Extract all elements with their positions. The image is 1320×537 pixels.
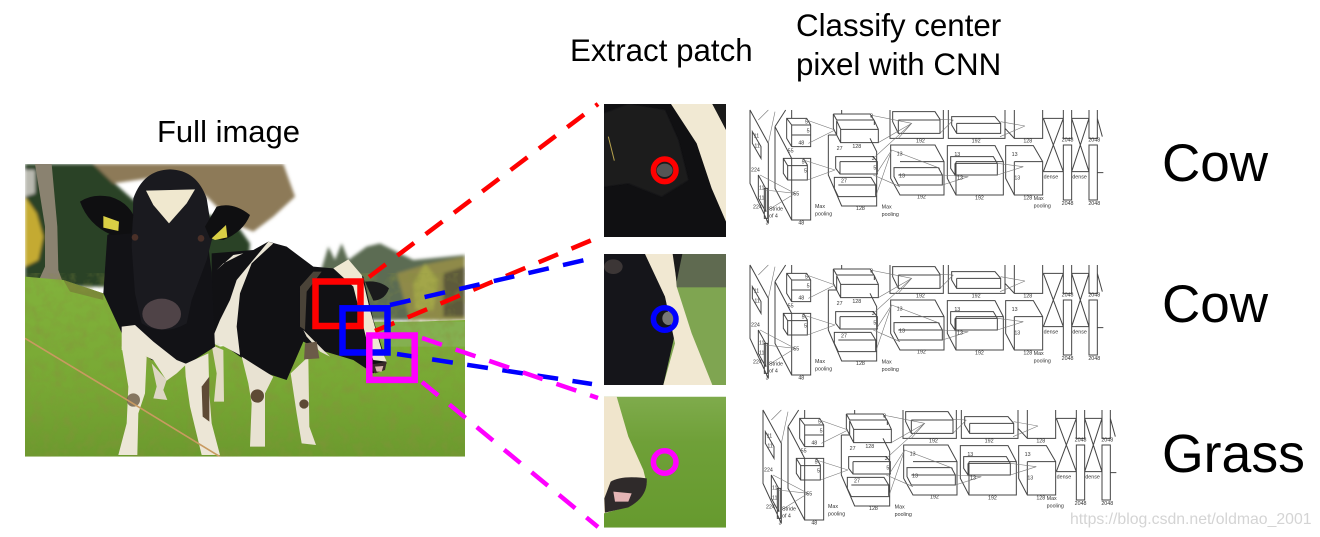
CNN diagram 2: 2048 xyxy=(1088,356,1100,362)
CNN diagram 3: 13 xyxy=(970,475,976,481)
CNN diagram 1: 192 xyxy=(975,195,984,201)
CNN diagram 1: 128 xyxy=(852,144,861,150)
CNN diagram 3: 2048 xyxy=(1075,501,1087,507)
CNN diagram 2: pooling xyxy=(882,367,899,373)
CNN diagram 1: 2048 xyxy=(1062,138,1074,144)
CNN diagram 2: 5 xyxy=(807,283,810,289)
CNN diagram 2: 13 xyxy=(899,328,905,334)
CNN diagram 2: 5 xyxy=(805,274,808,280)
CNN diagram 1: 13 xyxy=(899,173,905,179)
CNN diagram 3: 5 xyxy=(815,459,818,465)
CNN diagram 2: 192 xyxy=(917,350,926,356)
CNN diagram 3: 55 xyxy=(801,448,807,454)
CNN diagram 3: 128 xyxy=(1036,438,1045,444)
CNN diagram 2: Stride xyxy=(769,362,783,368)
red ring xyxy=(653,159,676,182)
CNN diagram 3: 3 xyxy=(779,520,782,526)
CNN diagram 3: 128 xyxy=(869,506,878,512)
CNN diagram 1: 3 xyxy=(870,113,873,119)
CNN diagram 3: 13 xyxy=(1025,452,1031,458)
CNN diagram 3: 192 xyxy=(930,495,939,501)
magenta square xyxy=(369,336,415,380)
CNN diagram 3: 192 xyxy=(988,495,997,501)
center pixel markers xyxy=(653,159,676,473)
CNN diagram 2: 13 xyxy=(897,307,903,313)
CNN diagram 3: 48 xyxy=(811,440,817,446)
heading: full image: Full image xyxy=(157,114,300,149)
CNN diagram 3: pooling xyxy=(828,511,845,517)
CNN diagram 2: 27 xyxy=(841,334,847,340)
CNN diagram 2: of 4 xyxy=(769,368,778,374)
CNN diagram 1: 224 xyxy=(751,168,760,174)
CNN diagram 1: Max xyxy=(1034,196,1044,202)
CNN diagram 2: 5 xyxy=(802,314,805,320)
CNN diagram 1: 5 xyxy=(873,165,876,171)
heading: classify center pixel with CNN xyxy=(796,8,1001,82)
class label: Cow: Cow xyxy=(1162,275,1269,334)
CNN diagram 1: 3 xyxy=(872,156,875,162)
CNN diagram 3: 55 xyxy=(806,492,812,498)
CNN diagram 1: 13 xyxy=(897,152,903,158)
CNN diagram 2: dense xyxy=(1072,330,1087,336)
CNN diagram 3: 13 xyxy=(910,452,916,458)
CNN diagram 3: 48 xyxy=(811,521,817,527)
CNN diagram 3: 3 xyxy=(885,456,888,462)
CNN diagram 1: dense xyxy=(1044,175,1058,181)
CNN diagram 2: 27 xyxy=(837,301,843,307)
CNN diagram 1: 11 xyxy=(759,195,765,201)
CNN diagram 1: of 4 xyxy=(769,213,778,219)
class label: Cow: Cow xyxy=(1162,134,1269,193)
photo: two cows in a pasture xyxy=(25,164,465,457)
heading: classify center pixel with CNN: Classify center xyxy=(796,8,1001,43)
CNN diagram 2: 2048 xyxy=(1062,356,1074,362)
CNN diagram 2: 128 xyxy=(1023,350,1032,356)
CNN diagram 2: dense xyxy=(1044,330,1058,336)
CNN diagram 1: 128 xyxy=(1023,138,1032,144)
CNN diagram 1: 5 xyxy=(804,169,807,175)
CNN diagram 2: 55 xyxy=(788,303,794,309)
CNN diagram 3: Max xyxy=(828,504,838,510)
CNN diagram 1: 5 xyxy=(805,119,808,125)
CNN diagram 3: Max xyxy=(895,505,905,511)
class label: Grass: Grass xyxy=(1162,424,1305,484)
CNN diagram 3: 224 xyxy=(764,468,773,474)
CNN diagram 2: pooling xyxy=(815,366,832,372)
CNN diagram 3: dense xyxy=(1057,475,1071,481)
CNN diagram 1: pooling xyxy=(815,211,832,217)
CNN diagram 1: 27 xyxy=(837,146,843,152)
CNN diagram 1: 3 xyxy=(766,220,769,226)
CNN diagram 2: 55 xyxy=(793,347,799,353)
CNN diagram 2: 2048 xyxy=(1088,293,1100,299)
CNN diagram 1: 11 xyxy=(759,185,765,191)
CNN diagram 2: 128 xyxy=(856,361,865,367)
CNN diagram 2: 192 xyxy=(916,293,925,299)
CNN diagram 3: 13 xyxy=(912,473,918,479)
CNN diagram 2: 224 xyxy=(751,323,760,329)
CNN diagram 2: 3 xyxy=(870,268,873,274)
CNN diagram 2: 13 xyxy=(954,307,960,313)
CNN diagram 1 xyxy=(750,110,1103,227)
CNN diagram 3: 27 xyxy=(850,446,856,452)
CNN diagram 1: 2048 xyxy=(1088,138,1100,144)
CNN diagram 1: Max xyxy=(882,205,892,211)
CNN diagram 2: 224 xyxy=(753,359,762,365)
CNN diagram 2: 128 xyxy=(1023,293,1032,299)
CNN diagram 3: 192 xyxy=(929,438,938,444)
CNN diagram 1: 224 xyxy=(753,204,762,210)
magenta projection lines xyxy=(422,338,598,527)
patch 1: cow eye xyxy=(604,104,726,237)
CNN diagram 3: 224 xyxy=(766,504,775,510)
CNN diagram 1: Max xyxy=(815,204,825,210)
CNN diagram 3: of 4 xyxy=(782,513,791,519)
CNN diagram 2: Max xyxy=(882,360,892,366)
CNN diagram 3: 128 xyxy=(1036,495,1045,501)
CNN diagram 1: 192 xyxy=(972,138,981,144)
CNN diagram 3: 5 xyxy=(886,465,889,471)
CNN diagram 3: 3 xyxy=(883,413,886,419)
extracted patches xyxy=(604,104,726,528)
CNN diagram 3: 5 xyxy=(818,419,821,425)
CNN diagram 3: 192 xyxy=(985,438,994,444)
CNN diagram 1: 5 xyxy=(802,159,805,165)
CNN diagram 2: 3 xyxy=(872,311,875,317)
CNN diagram 2: 48 xyxy=(798,376,804,382)
CNN diagram 2: 3 xyxy=(766,375,769,381)
CNN diagram 1: 2048 xyxy=(1088,201,1100,207)
CNN diagram 3 xyxy=(763,410,1116,527)
CNN diagram 1: 192 xyxy=(916,138,925,144)
magenta ring xyxy=(653,451,676,473)
CNN diagram 2: 11 xyxy=(754,299,760,305)
CNN diagram 2: 11 xyxy=(759,340,765,346)
CNN diagram 2: 13 xyxy=(957,330,963,336)
CNN diagram 2: 13 xyxy=(1014,330,1020,336)
CNN diagram 2: 13 xyxy=(1012,307,1018,313)
CNN diagram 1: 13 xyxy=(1012,152,1018,158)
CNN diagram 3: 13 xyxy=(967,452,973,458)
CNN diagram 3: 2048 xyxy=(1075,438,1087,444)
CNN diagram 1: 13 xyxy=(957,175,963,181)
CNN diagram 1: 11 xyxy=(754,144,760,150)
patch 2: cow cheek xyxy=(604,254,726,385)
CNN diagram 3: 2048 xyxy=(1101,501,1113,507)
CNN diagram 1: 48 xyxy=(798,140,804,146)
blue square xyxy=(342,308,388,352)
CNN diagram 2 xyxy=(750,265,1103,382)
blue projection lines xyxy=(390,260,592,384)
CNN diagram 1: pooling xyxy=(1034,203,1051,209)
CNN diagram 1: 11 xyxy=(754,133,759,139)
CNN diagram 1: Stride xyxy=(769,207,783,213)
CNN diagram 1: 55 xyxy=(793,192,799,198)
red projection lines xyxy=(369,104,598,331)
CNN diagram 1: 192 xyxy=(917,195,926,201)
CNN diagram 3: 11 xyxy=(772,485,778,491)
CNN diagram 1: 128 xyxy=(1023,195,1032,201)
CNN diagram 3: 11 xyxy=(772,495,778,501)
CNN diagram 2: 5 xyxy=(804,324,807,330)
red square xyxy=(316,282,360,326)
CNN diagram 1: dense xyxy=(1072,175,1087,181)
CNN diagram 3: 27 xyxy=(854,479,860,485)
CNN diagram 2: Max xyxy=(1034,351,1044,357)
CNN diagram 3: 13 xyxy=(1027,475,1033,481)
patch 3: cow nose and grass xyxy=(604,397,726,528)
CNN diagram 1: 27 xyxy=(841,179,847,185)
CNN diagram 2: 48 xyxy=(798,295,804,301)
watermark: https://blog.csdn.net/oldmao_2001 xyxy=(1070,511,1312,528)
CNN diagram 1: 13 xyxy=(954,152,960,158)
CNN diagram 2: 11 xyxy=(759,350,765,356)
blue ring xyxy=(653,308,676,330)
CNN diagram 3: 2048 xyxy=(1101,438,1113,444)
CNN diagram 3: Stride xyxy=(782,507,796,513)
CNN diagram 1: 128 xyxy=(856,206,865,212)
back cow xyxy=(212,242,389,447)
CNN diagram 3: 11 xyxy=(767,433,772,439)
CNN diagram 1: 55 xyxy=(788,148,794,154)
CNN diagram 2: pooling xyxy=(1034,358,1051,364)
CNN diagram 1: 5 xyxy=(807,128,810,134)
CNN diagram 2: 192 xyxy=(972,293,981,299)
CNN diagram 2: Max xyxy=(815,359,825,365)
CNN diagram 2: 11 xyxy=(754,288,759,294)
CNN diagram 3: 128 xyxy=(865,444,874,450)
CNN diagram 3: 11 xyxy=(767,444,773,450)
CNN diagram 3: pooling xyxy=(895,512,912,518)
CNN diagram 2: 5 xyxy=(873,320,876,326)
CNN diagram 3: dense xyxy=(1085,475,1100,481)
heading: classify center pixel with CNN: pixel with CNN xyxy=(796,47,1001,82)
CNN diagram 1: 48 xyxy=(798,221,804,227)
CNN diagram 3: 5 xyxy=(820,428,823,434)
patch outlines and projection lines xyxy=(316,104,598,527)
CNN diagram 1: 2048 xyxy=(1062,201,1074,207)
CNN diagram 2: 128 xyxy=(852,299,861,305)
CNN diagram 1: 13 xyxy=(1014,175,1020,181)
CNN diagram 3: 5 xyxy=(817,469,820,475)
front cow xyxy=(80,169,250,455)
CNN diagram 3: Max xyxy=(1047,496,1057,502)
CNN diagram 1: pooling xyxy=(882,212,899,218)
CNN diagram 3: pooling xyxy=(1047,503,1064,509)
CNN diagram 2: 2048 xyxy=(1062,293,1074,299)
CNN diagram 2: 192 xyxy=(975,350,984,356)
heading: extract patch: Extract patch xyxy=(570,33,753,68)
